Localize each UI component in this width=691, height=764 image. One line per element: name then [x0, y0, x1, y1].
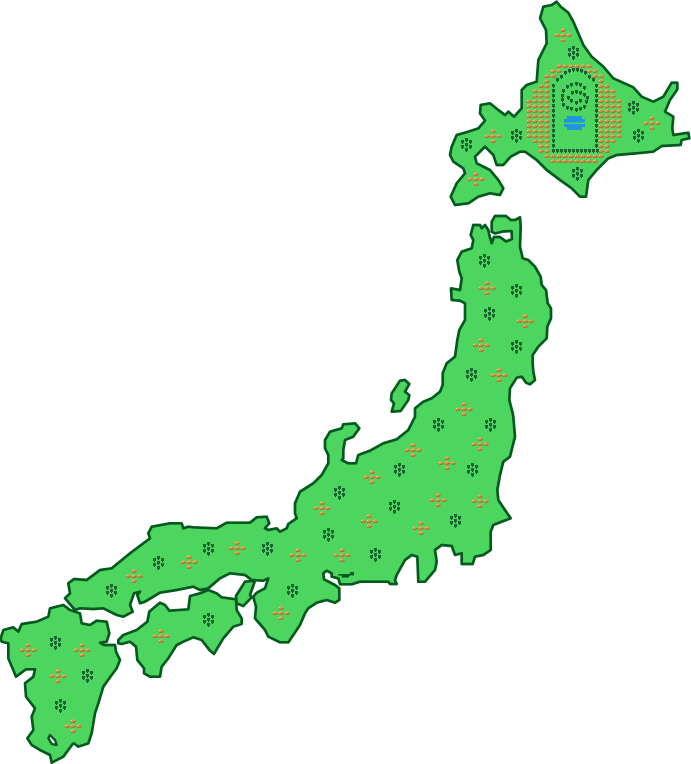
- icon: blue lake: [564, 116, 585, 130]
- landmass: Shikoku: [118, 590, 242, 677]
- landmass: Sado island: [391, 380, 409, 412]
- forest clusters: [50, 46, 644, 713]
- mountain ring: central Hokkaido: [526, 64, 622, 163]
- landmass: Honshu: [65, 216, 551, 642]
- landmass: Awaji island: [236, 581, 255, 606]
- forest arch: central Hokkaido: [552, 68, 599, 153]
- landmass: Kyushu: [1, 605, 120, 763]
- lake: Hamana: [338, 572, 354, 578]
- forest spiral: central Hokkaido: [561, 82, 589, 112]
- landmass: Hokkaido: [450, 2, 689, 205]
